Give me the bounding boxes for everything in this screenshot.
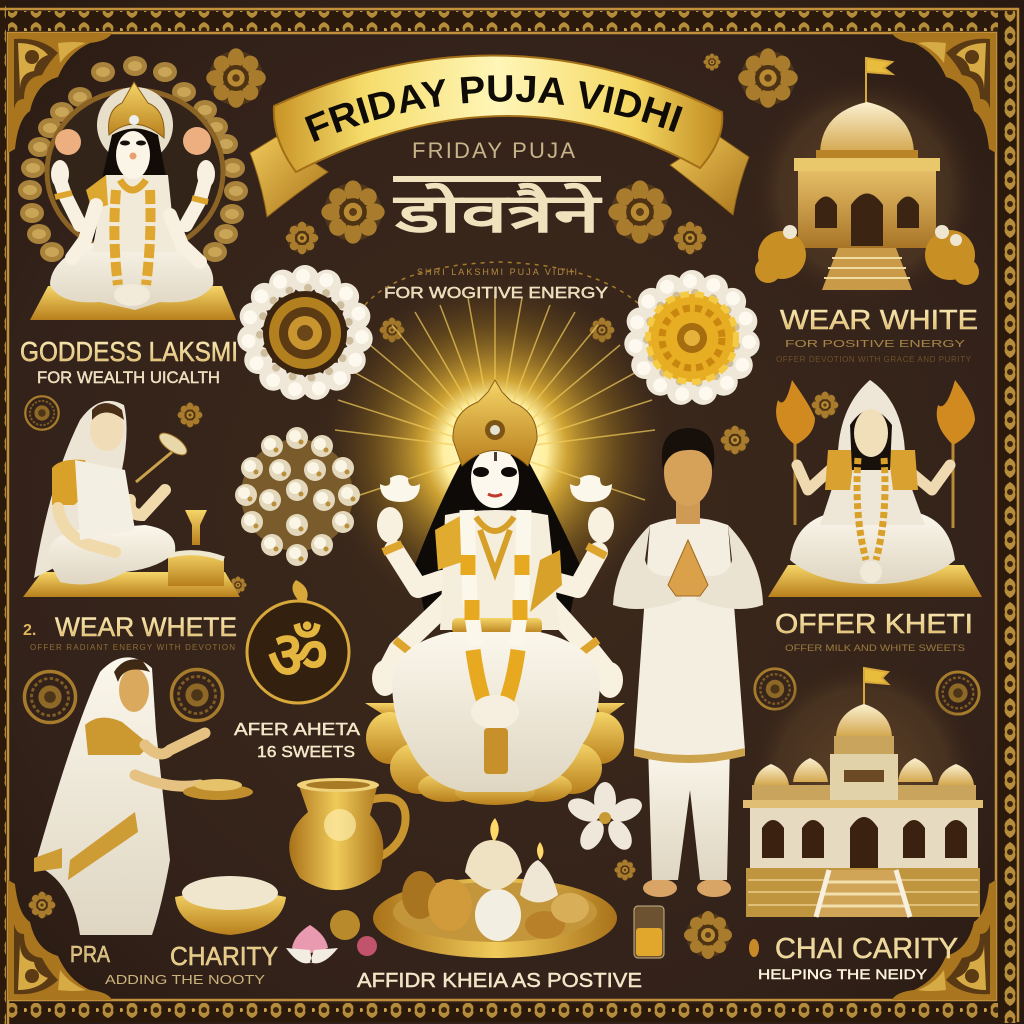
hair: [662, 428, 714, 470]
gold hem: [68, 812, 138, 880]
kurta: [634, 518, 745, 758]
blouse: [85, 718, 150, 755]
panel: goddess Lakshmi top left: [18, 56, 248, 320]
label: after aheta: [234, 719, 360, 761]
label: after aheta: 16 SWEETS: [257, 744, 355, 761]
torches: [776, 380, 975, 528]
blouse: [825, 450, 918, 490]
flag: [866, 58, 892, 125]
label: charity left: [70, 941, 278, 987]
veil and body: [34, 401, 135, 578]
label: offer kheti: [775, 608, 973, 653]
sweets: [402, 840, 589, 941]
necklace and garland: [114, 180, 150, 306]
label: charity right: CHAI CARITY: [775, 933, 958, 965]
necklace: [476, 517, 514, 572]
label: after aheta: AFER AHETA: [234, 719, 360, 739]
rice bowl: [175, 876, 286, 935]
om symbol: ॐ: [268, 618, 328, 692]
facade: [798, 170, 936, 248]
flowers: [755, 230, 979, 285]
crown: [109, 82, 164, 138]
neck and face: [676, 498, 700, 524]
torso: [92, 175, 176, 252]
subtitle: decorative script: डोवत्रैने: [393, 183, 602, 244]
dome: [820, 102, 914, 152]
lotus base: [365, 703, 625, 805]
title: FRIDAY PUJA VIDHI: [304, 75, 683, 142]
label: affirm kheia: AFFIDR KHEIA AS POSTIVE: [357, 970, 642, 992]
lotus flowers: [380, 475, 612, 502]
label: charity right: HELPING THE NEIDY: [758, 966, 928, 982]
halo ring of leaves: [18, 56, 248, 262]
label: goddess lakshmi: [20, 336, 238, 387]
central goddess: [365, 380, 625, 805]
face: [90, 409, 124, 451]
title ribbon banner: [250, 54, 750, 218]
offering plate: [183, 784, 253, 800]
saree body: [35, 657, 170, 935]
lotus flower: [286, 910, 377, 963]
domes: [754, 704, 974, 785]
subtitle: Friday Puja: FRIDAY PUJA: [412, 138, 575, 163]
sweets plate with lamp: [373, 818, 617, 958]
arms: [135, 733, 205, 786]
label: charity left: CHARITY: [170, 941, 278, 971]
subtitle: decorative script: [393, 176, 602, 244]
label: wear white right: FOR POSITIVE ENERGY: [785, 339, 965, 350]
torso: [440, 510, 560, 630]
label: goddess lakshmi: GODDESS LAKSMI: [20, 336, 238, 367]
juice glass: [634, 906, 664, 958]
bottom palace temple: [743, 660, 983, 917]
garland: [857, 458, 885, 560]
hair: [415, 455, 580, 615]
face and hair: [850, 410, 892, 470]
label: wear white right: WEAR WHITE: [780, 304, 978, 335]
lap robe: [48, 525, 175, 584]
lap robe: [50, 235, 213, 310]
standing woman serving food: [34, 657, 253, 935]
face: [116, 131, 150, 179]
crown: [453, 380, 537, 466]
label: wear white left: 2.: [23, 622, 36, 639]
bangles: [55, 193, 208, 202]
label: charity right: [749, 933, 958, 982]
belt: [452, 618, 542, 634]
garland: marigold flower: [623, 270, 761, 407]
saree drape: [75, 460, 135, 540]
flames: [490, 818, 544, 860]
arm: [58, 490, 165, 552]
upper arms: [394, 550, 598, 588]
garland: gold medallion: [236, 265, 374, 402]
arms: [797, 465, 950, 490]
white flower: [564, 782, 646, 854]
upper storey: [752, 736, 976, 800]
doors and windows: [815, 194, 919, 246]
label: offer kheti: OFFER MILK AND WHITE SWEETS: [785, 643, 965, 653]
blouse: [52, 460, 92, 505]
ribbon left tail: [250, 137, 328, 217]
label: wear white left: [23, 612, 237, 652]
face: [119, 668, 149, 712]
divider caption: SHRI LAKSHMI PUJA VIDHI: [417, 267, 577, 277]
top temple: [750, 58, 980, 305]
stairs: [822, 248, 912, 290]
garlands: [467, 510, 524, 645]
label: goddess lakshmi: FOR WEALTH UICALTH: [37, 368, 220, 387]
plinth and stairs: [746, 868, 980, 917]
offering stand: [168, 510, 224, 586]
face: [471, 448, 519, 508]
positive energy caption: FOR WOGITIVE ENERGY: [384, 285, 608, 302]
fan stick: [136, 452, 172, 482]
man with folded hands: [613, 428, 763, 897]
dotted arcs: [365, 262, 640, 305]
om symbol: [247, 580, 349, 703]
radiant glow behind central goddess: [323, 278, 667, 622]
veil: [820, 380, 925, 525]
panel: seated woman with lamp: [23, 401, 240, 597]
sleeves: [613, 525, 763, 609]
dhoti: [648, 745, 730, 880]
hair: [88, 128, 178, 240]
label: wear white left: OFFER RADIANT ENERGY WITH DEVOTION: [30, 643, 235, 652]
lap robe: [790, 512, 955, 584]
hands: [372, 507, 623, 698]
feet: [643, 879, 731, 897]
ribbon right tail: [670, 135, 749, 215]
golden jug: [289, 778, 406, 890]
label: charity left: ADDING THE NOOTY: [105, 972, 265, 987]
folded hands: [668, 540, 708, 596]
main body: [750, 806, 978, 868]
bangles: [383, 544, 606, 652]
ribbon main band: [274, 55, 722, 172]
label: wear white left: WEAR WHETE: [55, 612, 237, 642]
label: charity left: PRA: [70, 941, 111, 967]
platform: [23, 572, 240, 597]
hands and lotus: [51, 127, 215, 188]
label: wear white right: [776, 304, 978, 364]
crown aura: [97, 87, 173, 163]
base platform: [30, 286, 236, 320]
label: offer kheti: OFFER KHETI: [775, 608, 973, 639]
lower arms: [385, 600, 610, 675]
flag: [864, 668, 888, 705]
arms: [60, 180, 205, 262]
platform: [768, 565, 982, 597]
right seated woman: [768, 380, 982, 597]
arched doors: [762, 817, 967, 868]
flower cluster: [235, 427, 360, 566]
label: wear white right: OFFER DEVOTION WITH GRACE AND PURITY: [776, 355, 972, 364]
skirt: [392, 632, 600, 792]
